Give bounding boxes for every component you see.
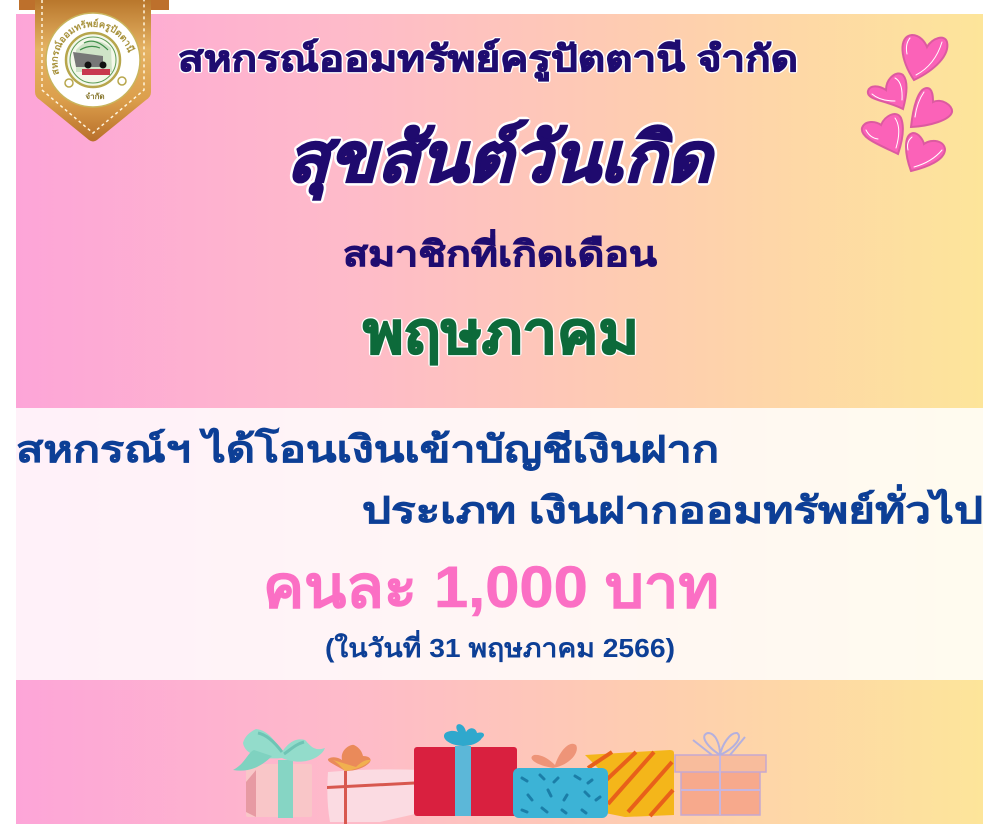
title: happy birthday: สุขสันต์วันเกิด [286, 120, 715, 200]
heading: cooperative name: สหกรณ์ออมทรัพย์ครูปัตตานี จำกัด [178, 38, 798, 82]
gift: blue patterned box [513, 744, 608, 818]
gift: red box with blue ribbon [414, 724, 517, 816]
ribbon badge with cooperative seal: สหกรณ์ออมทรัพย์ครูปัตตานี [52, 18, 136, 75]
ribbon badge with cooperative seal: จำกัด [85, 92, 105, 101]
subtitle: สมาชิกที่เกิดเดือน [343, 229, 657, 274]
white message band [16, 408, 983, 680]
gift: pink box with mint bow [233, 729, 325, 818]
message line 2: ประเภท เงินฝากออมทรัพย์ทั่วไป [362, 484, 983, 531]
message line 1: สหกรณ์ฯ ได้โอนเงินเข้าบัญชีเงินฝาก [16, 427, 719, 471]
amount: คนละ 1,000 บาท [263, 555, 719, 620]
ribbon badge with cooperative seal [19, 0, 169, 142]
payment date: (ในวันที่ 31 พฤษภาคม 2566) [325, 629, 675, 663]
gift: orange striped box [585, 750, 674, 817]
month: พฤษภาคม [363, 301, 639, 366]
heading: cooperative name: สหกรณ์ออมทรัพย์ครูปัตตานี จำกัด [178, 38, 798, 82]
month: พฤษภาคม [363, 301, 639, 366]
gifts illustration [233, 724, 766, 824]
icon: pink hearts [862, 35, 952, 171]
title: happy birthday: สุขสันต์วันเกิด [286, 120, 715, 200]
gift: white box with red string [327, 745, 424, 824]
gift: line-art box [675, 733, 766, 815]
